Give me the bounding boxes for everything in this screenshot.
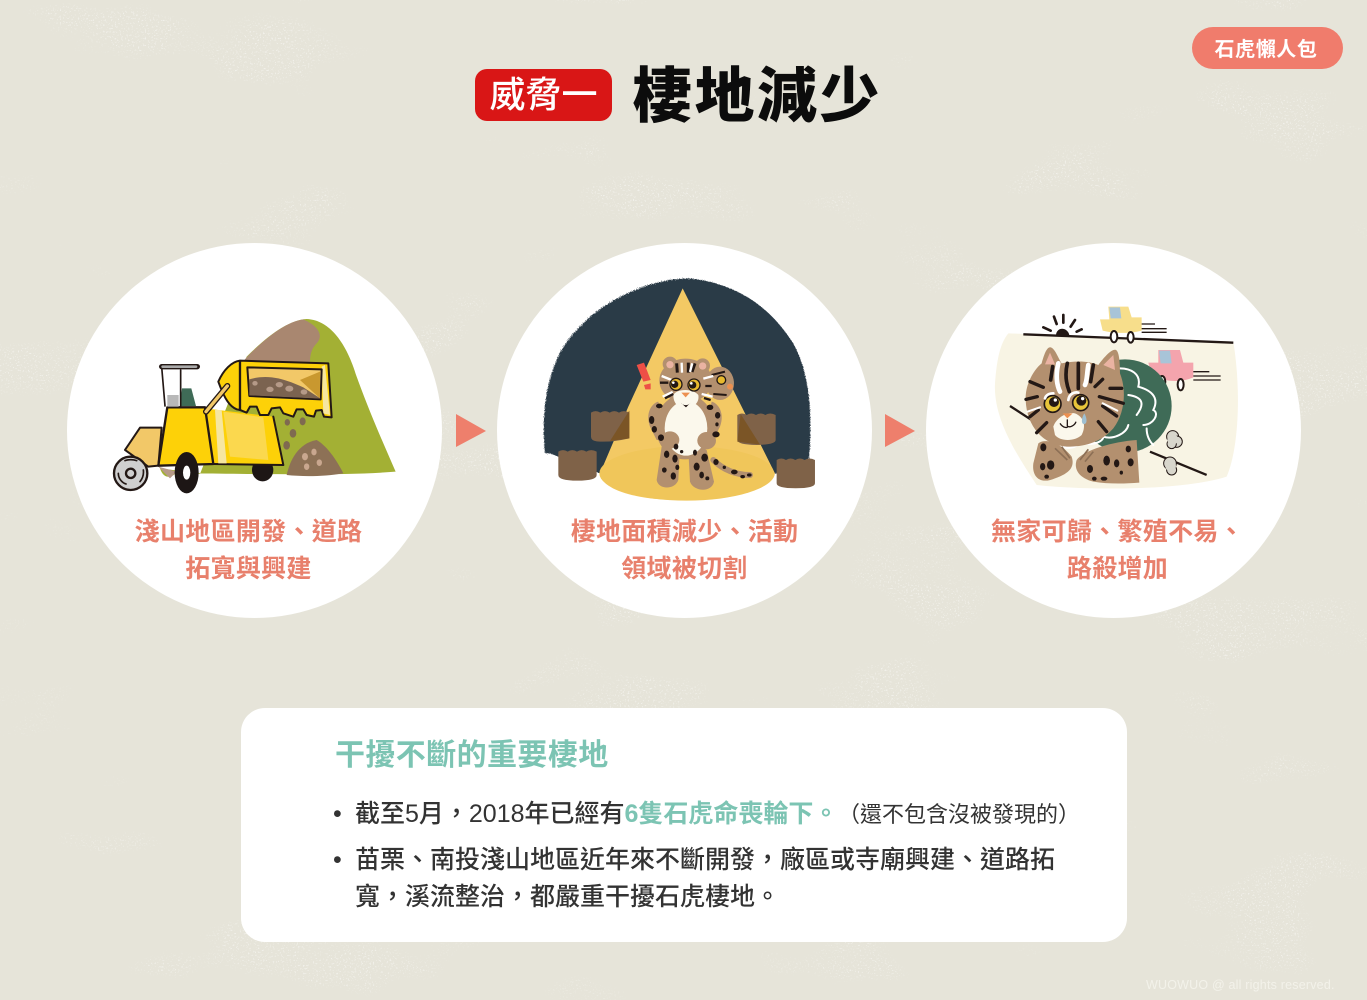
bullet 2: 寬，溪流整治，都嚴重干擾石虎棲地。 <box>355 882 780 910</box>
tag: 石虎懶人包: 石虎懶人包 <box>1214 39 1318 61</box>
caption 3: 無家可歸、繁殖不易、 <box>991 518 1244 546</box>
title: 棲地減少 <box>632 63 882 130</box>
caption 3: 路殺增加 <box>1067 555 1168 583</box>
arrow 1 <box>456 414 486 447</box>
panel: circle 2 <box>497 243 872 618</box>
panel: important habitat text <box>241 708 1127 942</box>
bullet 1: • <box>333 800 342 828</box>
arrow 2 <box>885 414 915 447</box>
bullet 1 note: （還不包含沒被發現的） <box>838 802 1080 827</box>
caption 2: 棲地面積減少、活動 <box>571 518 798 546</box>
panel: circle 1 <box>67 243 442 618</box>
badge: 威脅一: 威脅一 <box>489 74 598 115</box>
badge: 威脅一 <box>475 69 612 121</box>
caption 1: 淺山地區開發、道路 <box>135 518 362 546</box>
copyright: WUOWUO @ all rights reserved. <box>1146 978 1335 992</box>
tag: 石虎懶人包 <box>1192 27 1343 69</box>
bullet 2 <box>333 846 1055 910</box>
caption 2: 領域被切割 <box>621 555 748 583</box>
illustration: cat fleeing road with bundle <box>995 307 1238 489</box>
caption 2 <box>571 518 798 583</box>
caption 1: 拓寬與興建 <box>185 555 312 583</box>
panel heading: 干擾不斷的重要棲地 <box>335 739 609 772</box>
illustration: bulldozer and hill <box>114 319 396 493</box>
bullet 2: • <box>333 846 342 874</box>
illustration: leopard cat in shrinking habitat <box>544 278 815 501</box>
bullet 1: 截至5月，2018年已經有6隻石虎命喪輪下。 <box>355 800 838 828</box>
panel: circle 3 <box>926 243 1301 618</box>
caption 1 <box>135 518 362 583</box>
bullet 2: 苗栗、南投淺山地區近年來不斷開發，廠區或寺廟興建、道路拓 <box>355 846 1055 874</box>
caption 3 <box>991 518 1244 583</box>
